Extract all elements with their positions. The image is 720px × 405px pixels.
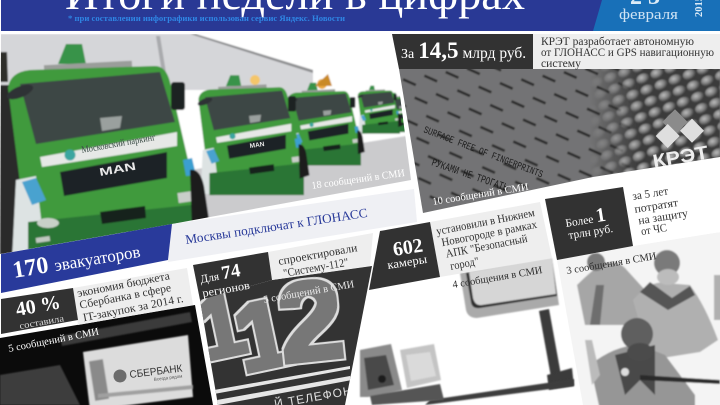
Sberbank photo: СБЕРБАНК — [129, 363, 184, 381]
description text: Сбербанка в сфере — [79, 282, 172, 312]
label: 14.5 billion — [392, 34, 533, 69]
rescuers photo — [550, 232, 720, 405]
description text — [73, 268, 193, 325]
label: 1 trillion: Более1 — [563, 204, 607, 232]
label: 1 trillion: трлн руб. — [568, 223, 614, 242]
caption band — [168, 189, 417, 262]
description text: потратят — [634, 197, 679, 216]
description text: систему — [541, 58, 581, 70]
label: 40 percent: 40 % — [14, 291, 62, 321]
data source note: * при составлении инфографики использован сервис Яндекс. Новости — [68, 14, 345, 23]
date badge — [593, 0, 720, 31]
description text — [430, 202, 552, 277]
big 112 graphic: 1 — [225, 278, 300, 394]
panel: tow trucks photo — [0, 34, 419, 262]
description text — [533, 34, 720, 70]
panel: tow trucks photo: MAN — [249, 141, 265, 150]
base — [547, 368, 574, 390]
label: 602 cameras — [369, 222, 440, 290]
description text: за 5 лет — [632, 185, 669, 203]
big 112 graphic — [200, 276, 347, 376]
panel: tow trucks photo: MAN — [98, 161, 137, 179]
right rescuer — [633, 283, 718, 360]
label: 602 cameras: 602 — [391, 235, 424, 261]
pole — [539, 309, 561, 377]
System 112 photo — [200, 266, 372, 405]
caption band: Москвы подключат к ГЛОНАСС — [184, 205, 368, 247]
description text — [268, 233, 373, 280]
icon: KRET logo: КРЭТ — [651, 142, 710, 173]
caption: 10 media messages: 10 сообщений в СМИ — [432, 182, 530, 208]
front rescuer — [590, 345, 695, 405]
label: 40 percent — [1, 288, 78, 334]
KRET photo: SURFACE FREE OF FINGERPRINTS — [422, 125, 544, 181]
Sberbank photo: Всегда рядом — [154, 374, 183, 382]
icon: KRET logo — [653, 109, 707, 167]
description text — [623, 175, 720, 246]
description text: "Систему-112" — [282, 257, 350, 280]
label: 74 regions: Для74 — [198, 260, 243, 288]
caption: 5 media messages: 5 сообщений в СМИ — [263, 279, 356, 306]
header bar — [1, 0, 720, 31]
description text: экономия бюджета — [76, 270, 171, 300]
description text: Новогороде в рамках — [441, 219, 538, 249]
icon: Sberbank logo — [114, 370, 126, 382]
description text: IT-закупок за 2014 г. — [82, 293, 185, 324]
description text: от ЧС — [640, 222, 668, 238]
caption: 18 media messages: 18 сообщений в СМИ — [311, 168, 406, 192]
panel: 602 cameras — [345, 202, 575, 405]
panel: tow trucks photo: Московский паркинг — [81, 132, 156, 156]
panel: tow trucks caption — [1, 189, 417, 293]
label: 602 cameras: камеры — [386, 252, 428, 272]
label: 74 regions: регионов — [201, 280, 251, 300]
description text: установили в Нижнем — [435, 207, 536, 238]
description text: от ГЛОНАСС и GPS навигационную — [541, 47, 714, 59]
camera sign — [460, 258, 559, 318]
caption: 3 media messages: 3 сообщения в СМИ — [566, 251, 658, 277]
big 112 graphic: 1 — [187, 276, 254, 380]
caption: 4 media messages: 4 сообщения в СМИ — [452, 265, 544, 291]
description text: спроектировали — [277, 242, 358, 268]
big 112 graphic: 2 — [272, 256, 349, 387]
left rescuer — [577, 262, 645, 325]
caption: 5 media messages: 5 сообщений в СМИ — [7, 327, 100, 355]
stat: 170 tow trucks — [1, 224, 172, 293]
description text: город" — [449, 256, 480, 273]
panel: System 112 — [187, 233, 380, 405]
stat: 170 tow trucks: 170эвакуаторов — [11, 237, 142, 284]
KRET photo: РУКАМИ НЕ ТРОГАТЬ — [430, 157, 510, 195]
description text: АПК "Безопасный — [445, 233, 529, 261]
label: 74 regions — [193, 252, 272, 300]
date badge: февраля — [619, 7, 678, 23]
panel: KRET navigation system — [392, 34, 720, 220]
Sberbank photo — [0, 300, 220, 405]
KRET photo — [399, 69, 720, 213]
description text: КРЭТ разработает автономную — [541, 36, 694, 48]
description text: на защиту — [637, 208, 689, 227]
panel: Sberbank savings — [0, 268, 220, 405]
label: 40 percent: составила — [19, 314, 66, 332]
label: 14.5 billion: За14,5 млрд руб. — [401, 38, 526, 63]
monitors — [360, 344, 444, 405]
panel: emergency protection — [545, 175, 720, 405]
label: 1 trillion — [545, 187, 633, 260]
